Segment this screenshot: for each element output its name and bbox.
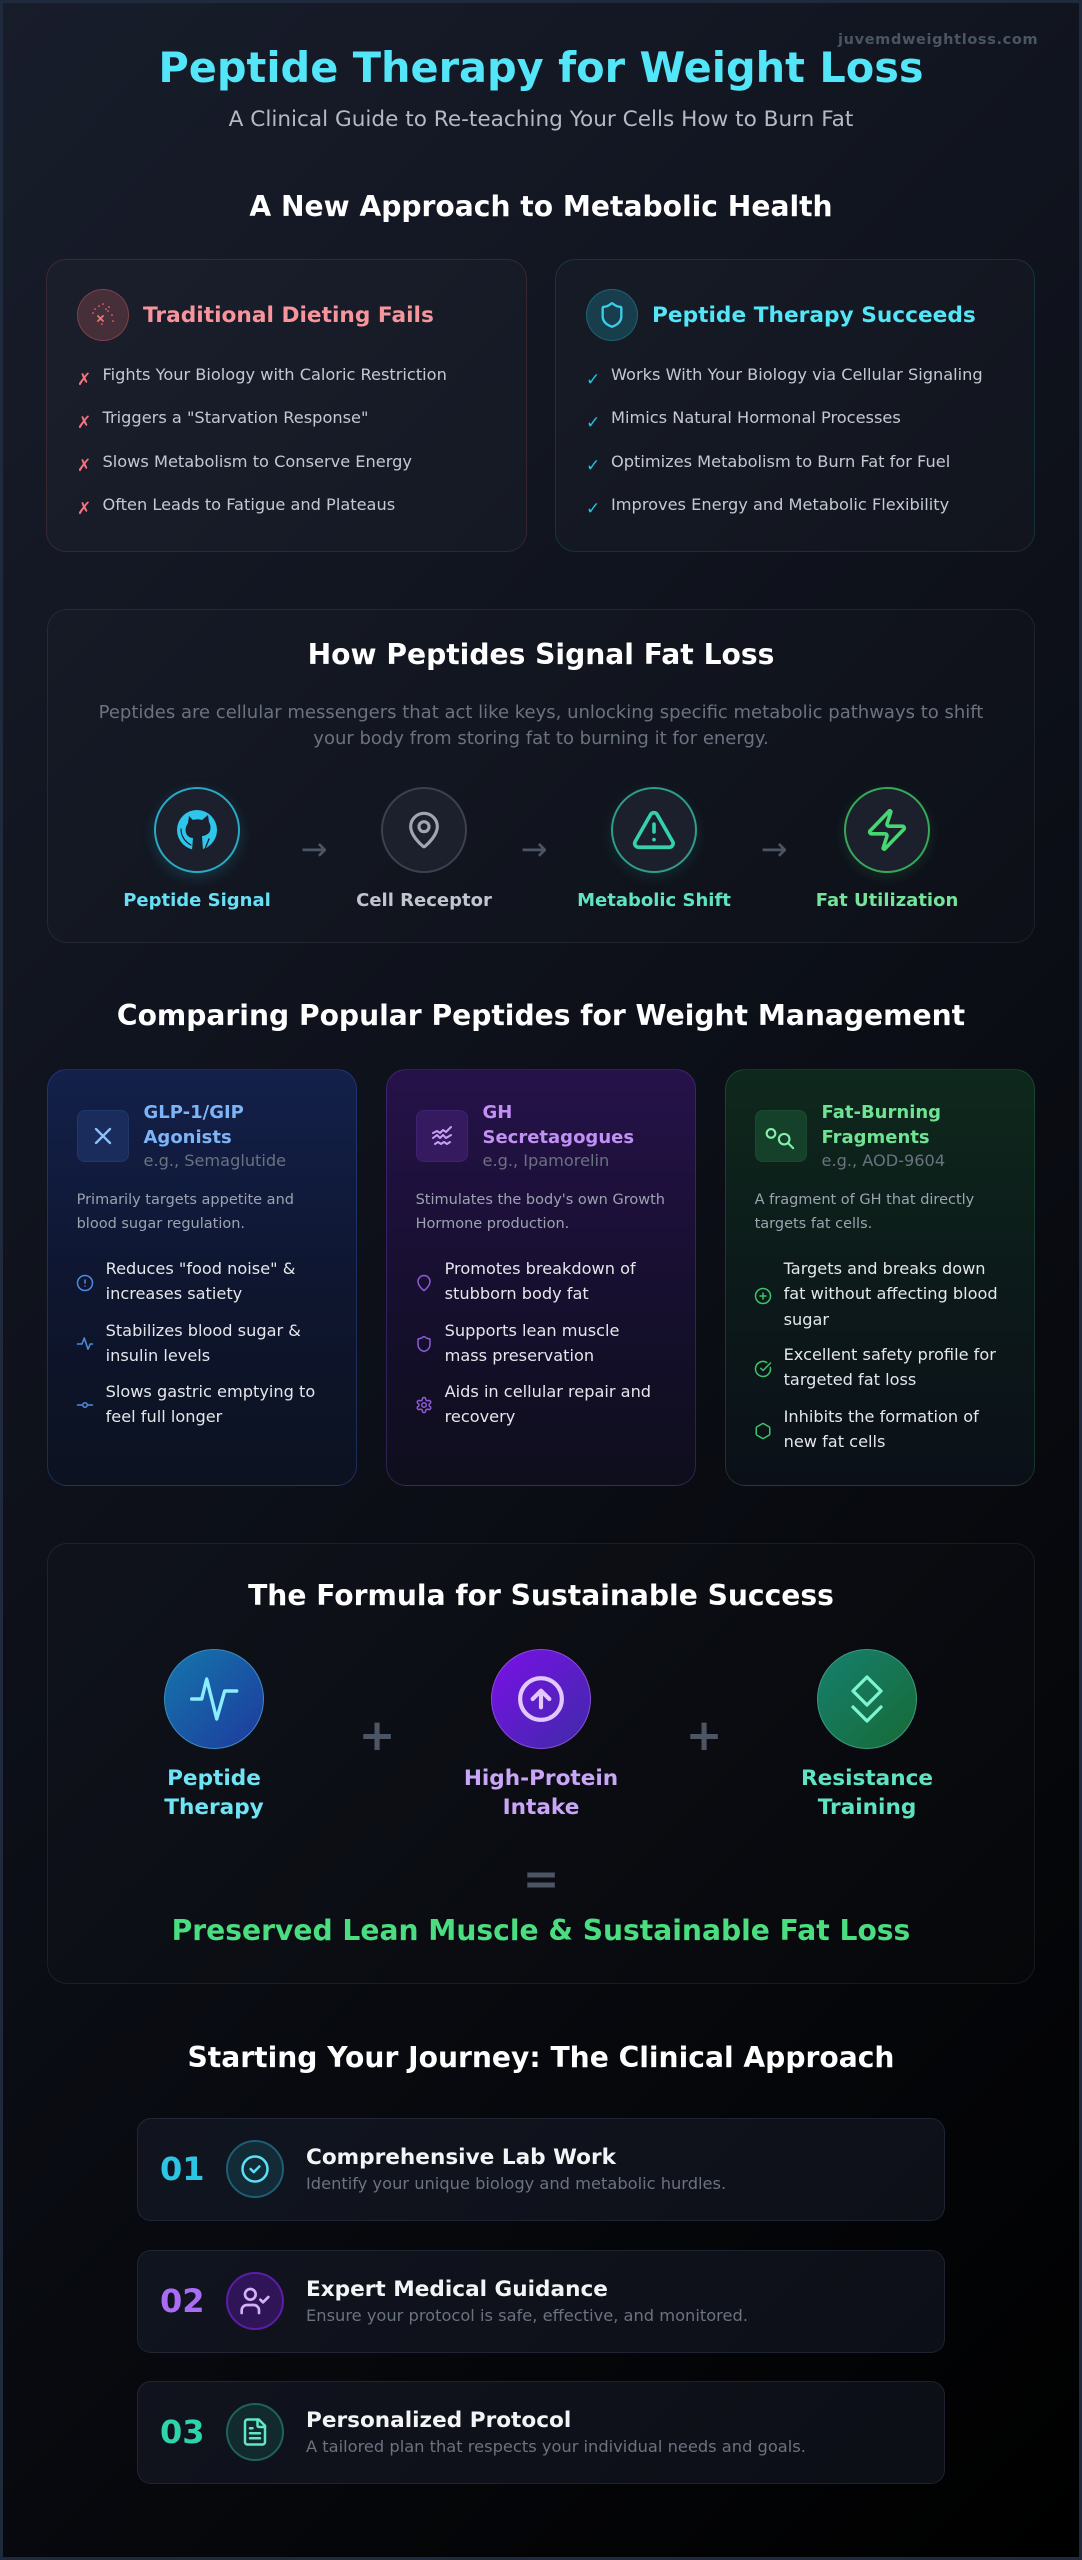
description: Stimulates the body's own Growth <box>416 1192 665 1208</box>
step: fat utilization <box>816 787 958 911</box>
benefit <box>444 1382 651 1426</box>
benefit: recovery <box>445 1407 515 1426</box>
list: peptide benefits: Mimics Natural Hormonal Processes <box>611 408 901 427</box>
label: Therapy <box>164 1795 264 1820</box>
panel: formula for success <box>47 1543 1035 1984</box>
step: expert medical guidance <box>137 2250 945 2353</box>
benefit <box>106 1320 301 1365</box>
step label: Cell Receptor <box>356 890 492 911</box>
intro text: your body from storing fat to burning it for energy. <box>313 728 769 749</box>
arrow: → <box>521 830 547 868</box>
example: e.g., Semaglutide <box>144 1151 286 1170</box>
description <box>77 1192 294 1232</box>
card title <box>482 1102 634 1148</box>
step: peptide signal <box>123 787 271 911</box>
benefit: sugar <box>784 1310 829 1329</box>
list: peptide benefits: ✓ <box>586 370 600 390</box>
card title: Agonists <box>144 1127 232 1148</box>
benefit: Inhibits the formation of <box>784 1406 979 1426</box>
card title <box>144 1102 244 1148</box>
plus sign: + <box>359 1710 395 1761</box>
label: Peptide <box>167 1766 261 1791</box>
list: dieting drawbacks: ✗ <box>77 456 91 476</box>
list: peptide benefits: Works With Your Biology via Cellular Signaling <box>611 365 983 384</box>
icon: shield <box>586 289 638 341</box>
list: peptide benefits: Optimizes Metabolism to Burn Fat for Fuel <box>611 452 950 470</box>
step: personalized protocol <box>137 2381 945 2484</box>
heading: clinical approach: Starting Your Journey: The Clinical Approach <box>188 2041 894 2074</box>
description: blood sugar regulation. <box>77 1216 245 1232</box>
panel heading: Peptide Therapy Succeeds <box>652 303 976 328</box>
subtitle: A Clinical Guide to Re-teaching Your Cells How to Burn Fat <box>229 107 853 132</box>
list: peptide benefits: Improves Energy and Metabolic Flexibility <box>611 495 949 514</box>
label: Resistance <box>801 1766 933 1791</box>
description <box>754 1192 974 1232</box>
description: Primarily targets appetite and <box>77 1192 294 1208</box>
icon: commit node <box>76 1402 94 1408</box>
description: targets fat cells. <box>755 1216 872 1232</box>
benefit: fat without affecting blood <box>784 1284 998 1303</box>
example: e.g., Ipamorelin <box>482 1151 609 1170</box>
panel: how peptides signal fat loss <box>47 609 1035 943</box>
step label: Fat Utilization <box>816 890 958 911</box>
card title: GLP-1/GIP <box>144 1102 244 1123</box>
icon: alert circle <box>76 1274 94 1292</box>
formula item: resistance training <box>801 1649 933 1820</box>
benefit: increases satiety <box>106 1284 242 1303</box>
list: peptide benefits: ✓ <box>586 413 600 433</box>
list: dieting drawbacks: Often Leads to Fatigue and Plateaus <box>102 495 395 514</box>
step: metabolic shift <box>577 787 731 911</box>
benefit: Slows gastric emptying to <box>106 1382 315 1400</box>
benefit: targeted fat loss <box>784 1370 916 1389</box>
title: Peptide Therapy for Weight Loss <box>158 44 924 92</box>
label <box>164 1766 264 1820</box>
example: e.g., AOD-9604 <box>822 1151 945 1170</box>
benefit: Promotes breakdown of <box>445 1259 636 1278</box>
icon: drop pin <box>417 1274 431 1292</box>
icon: gear <box>416 1396 432 1414</box>
intro text: Peptides are cellular messengers that act like keys, unlocking specific metabolic pathways to shift <box>99 702 983 723</box>
step label: Metabolic Shift <box>577 890 731 911</box>
benefit: stubborn body fat <box>445 1284 589 1303</box>
plus sign: + <box>686 1710 722 1761</box>
card title: Secretagogues <box>482 1127 634 1148</box>
list: dieting drawbacks: Triggers a "Starvation Response" <box>102 408 368 427</box>
benefit: Excellent safety profile for <box>784 1345 996 1364</box>
icon: activity <box>76 1337 94 1350</box>
icon: check circle <box>754 1360 772 1378</box>
benefit <box>106 1259 295 1303</box>
panel heading: Traditional Dieting Fails <box>143 303 434 328</box>
list: dieting drawbacks <box>77 365 447 519</box>
list: peptide benefits: ✓ <box>586 499 600 519</box>
icon: pulse <box>164 1649 264 1749</box>
equals sign: = <box>523 1854 559 1905</box>
benefit: feel full longer <box>106 1407 222 1426</box>
icon: plus circle <box>754 1288 772 1304</box>
icon: search with circle <box>755 1110 807 1162</box>
benefit <box>784 1259 998 1329</box>
icon: user check <box>226 2272 284 2330</box>
label: Intake <box>503 1795 579 1820</box>
step number: 03 <box>160 2413 205 2451</box>
card title: GH <box>482 1102 512 1123</box>
icon: hexagon <box>756 1422 770 1440</box>
step description: Identify your unique biology and metabolic hurdles. <box>306 2174 726 2193</box>
benefit: Aids in cellular repair and <box>445 1382 651 1400</box>
icon: diamond and chevron <box>817 1649 917 1749</box>
description: Hormone production. <box>416 1216 569 1232</box>
card: GH secretagogues <box>386 1069 696 1486</box>
formula item: high-protein intake <box>464 1649 618 1820</box>
benefit: Supports lean muscle <box>445 1320 619 1340</box>
list: dieting drawbacks: ✗ <box>77 499 91 519</box>
heading: comparing peptides: Comparing Popular Peptides for Weight Management <box>117 999 965 1032</box>
list: dieting drawbacks: Slows Metabolism to Conserve Energy <box>102 452 412 470</box>
benefit: insulin levels <box>106 1346 210 1365</box>
card title: Fat-Burning <box>822 1102 941 1123</box>
benefit <box>784 1406 980 1451</box>
benefit: Reduces "food noise" & <box>106 1259 295 1278</box>
step number: 02 <box>160 2282 205 2320</box>
benefit: new fat cells <box>784 1432 885 1451</box>
step: cell receptor <box>356 787 492 911</box>
step: comprehensive lab work <box>137 2118 945 2221</box>
step title: Personalized Protocol <box>306 2408 571 2433</box>
icon: check circle <box>226 2140 284 2198</box>
step number: 01 <box>160 2150 205 2188</box>
icon: map pin <box>381 787 467 873</box>
heading: new approach: A New Approach to Metabolic Health <box>249 190 833 223</box>
step description: Ensure your protocol is safe, effective, and monitored. <box>306 2306 748 2325</box>
benefit <box>106 1382 315 1426</box>
benefit: Stabilizes blood sugar & <box>106 1320 301 1340</box>
card: fat-burning fragments <box>725 1069 1035 1486</box>
panel: traditional dieting fails <box>46 259 527 552</box>
result text: Preserved Lean Muscle & Sustainable Fat Loss <box>172 1914 910 1947</box>
step title: Comprehensive Lab Work <box>306 2145 616 2170</box>
description: A fragment of GH that directly <box>755 1192 974 1208</box>
benefit: mass preservation <box>445 1346 594 1365</box>
list: dieting drawbacks: ✗ <box>77 370 91 390</box>
arrow: → <box>761 830 787 868</box>
list: peptide benefits: ✓ <box>586 456 600 476</box>
list: dieting drawbacks: Fights Your Biology with Caloric Restriction <box>102 365 447 384</box>
step description: A tailored plan that respects your individual needs and goals. <box>306 2437 806 2456</box>
panel: peptide therapy succeeds <box>555 259 1035 552</box>
icon: shield <box>417 1336 431 1352</box>
icon: document <box>226 2403 284 2461</box>
icon: x mark <box>77 1110 129 1162</box>
icon: lightning bolt <box>844 787 930 873</box>
benefit <box>784 1345 996 1389</box>
arrow: → <box>301 830 327 868</box>
icon: arrow up circle <box>491 1649 591 1749</box>
label: High-Protein <box>464 1766 618 1791</box>
benefit <box>445 1259 636 1303</box>
formula item: peptide therapy <box>164 1649 264 1820</box>
card title <box>822 1102 941 1148</box>
label <box>464 1766 618 1820</box>
card title: Fragments <box>822 1127 930 1148</box>
icon: github mark <box>154 787 240 873</box>
card: GLP-1/GIP agonists <box>47 1069 357 1486</box>
watermark: juvemdweightloss.com <box>838 32 1038 48</box>
panel heading: The Formula for Sustainable Success <box>248 1579 834 1612</box>
list: dieting drawbacks: ✗ <box>77 413 91 433</box>
intro text <box>99 702 983 749</box>
icon: warning triangle <box>611 787 697 873</box>
step title: Expert Medical Guidance <box>306 2277 608 2302</box>
panel heading: How Peptides Signal Fat Loss <box>308 638 774 671</box>
label: Training <box>818 1795 916 1820</box>
icon: waves <box>416 1110 468 1162</box>
benefit: Targets and breaks down <box>784 1259 986 1278</box>
benefit <box>445 1320 619 1365</box>
step label: Peptide Signal <box>123 890 271 911</box>
icon: broken sparkle <box>76 289 128 341</box>
list: peptide benefits <box>586 365 983 519</box>
label <box>801 1766 933 1820</box>
description <box>416 1192 665 1232</box>
